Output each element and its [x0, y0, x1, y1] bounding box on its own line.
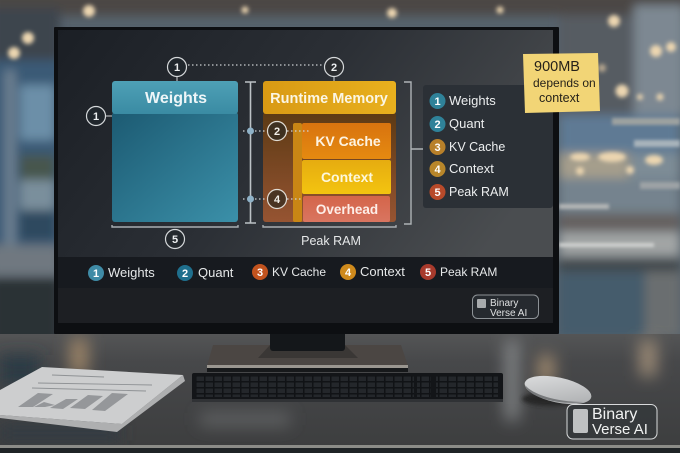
corner logo: Binary — [592, 406, 637, 423]
strip item 2 — [177, 265, 234, 281]
strip item 5: 5 — [425, 267, 431, 279]
context block: Context — [321, 169, 373, 185]
legend item 5 — [430, 184, 509, 200]
weights label: Weights — [145, 90, 207, 107]
legend item 1: Weights — [449, 93, 496, 108]
vertical bracket with markers — [243, 82, 309, 223]
legend item 4: Context — [449, 161, 494, 176]
memory stripe — [293, 123, 302, 222]
panel: side legend — [423, 85, 553, 208]
strip item 1: Weights — [108, 265, 155, 280]
legend item 4: 4 — [434, 164, 441, 176]
strip item 3: 3 — [257, 267, 263, 279]
kv cache block: KV Cache — [315, 133, 381, 149]
screen logo — [472, 295, 538, 319]
screen logo: Binary — [490, 298, 518, 309]
kv cache block — [302, 123, 391, 159]
bottom bracket: peak ram: Peak RAM — [301, 234, 361, 248]
legend item 3: 3 — [434, 142, 441, 154]
marker 2: 2 — [274, 126, 280, 138]
right bracket — [404, 82, 423, 224]
legend item 3: KV Cache — [449, 140, 505, 154]
legend item 5: Peak RAM — [449, 185, 509, 199]
strip item 4 — [340, 264, 405, 280]
overhead block — [303, 196, 390, 222]
legend item 4 — [430, 161, 494, 177]
marker 2 — [268, 122, 286, 140]
blurred office background — [0, 0, 680, 348]
legend item 3 — [430, 139, 505, 155]
runtime memory label: Runtime Memory — [270, 91, 388, 107]
screen logo: Verse AI — [490, 308, 527, 319]
strip item 1: 1 — [93, 268, 99, 280]
marker 4: 4 — [274, 194, 281, 206]
weights header — [112, 81, 238, 114]
left marker 1: 1 — [93, 111, 99, 123]
marker 2: 2 — [331, 62, 337, 74]
paper bar chart — [18, 393, 128, 411]
keyboard — [192, 373, 503, 402]
strip item 3 — [252, 264, 326, 280]
bottom legend strip — [58, 257, 553, 288]
panel: weights block — [112, 81, 238, 222]
strip item 5 — [420, 264, 497, 280]
strip item 5: Peak RAM — [440, 265, 497, 279]
left marker 1 — [86, 106, 112, 126]
mouse — [522, 371, 594, 409]
marker 4 — [268, 190, 286, 208]
monitor stand — [207, 331, 408, 372]
sticky note — [523, 53, 600, 113]
strip item 3: KV Cache — [272, 265, 326, 279]
legend item 1 — [430, 93, 496, 109]
sticky note: depends on — [533, 76, 596, 90]
monitor screen — [58, 30, 553, 323]
marker 2 — [324, 58, 344, 76]
marker 1: 1 — [174, 62, 180, 74]
legend item 2: Quant — [449, 116, 485, 131]
papers — [0, 367, 185, 432]
strip item 4: Context — [360, 264, 405, 279]
strip item 1 — [88, 265, 155, 281]
context block — [302, 160, 391, 194]
sticky note: context — [539, 91, 580, 105]
legend item 2 — [430, 116, 485, 132]
top connector with markers — [168, 58, 344, 81]
panel: runtime memory block — [263, 81, 396, 222]
marker 5: 5 — [172, 234, 178, 246]
monitor bezel — [54, 27, 559, 334]
corner logo — [567, 404, 657, 439]
legend item 1: 1 — [434, 96, 441, 108]
strip item 2: 2 — [182, 268, 188, 280]
desk — [0, 334, 680, 453]
runtime memory header — [263, 81, 396, 114]
overhead block: Overhead — [316, 202, 378, 217]
corner logo: Verse AI — [592, 421, 648, 438]
bottom bracket: weights — [112, 225, 238, 248]
bottom bracket: peak ram — [263, 225, 396, 248]
marker 1 — [168, 58, 186, 76]
strip item 2: Quant — [198, 265, 234, 280]
legend item 2: 2 — [434, 119, 441, 131]
sticky note: 900MB — [534, 59, 580, 75]
strip item 4: 4 — [345, 267, 352, 279]
legend item 5: 5 — [434, 187, 441, 199]
